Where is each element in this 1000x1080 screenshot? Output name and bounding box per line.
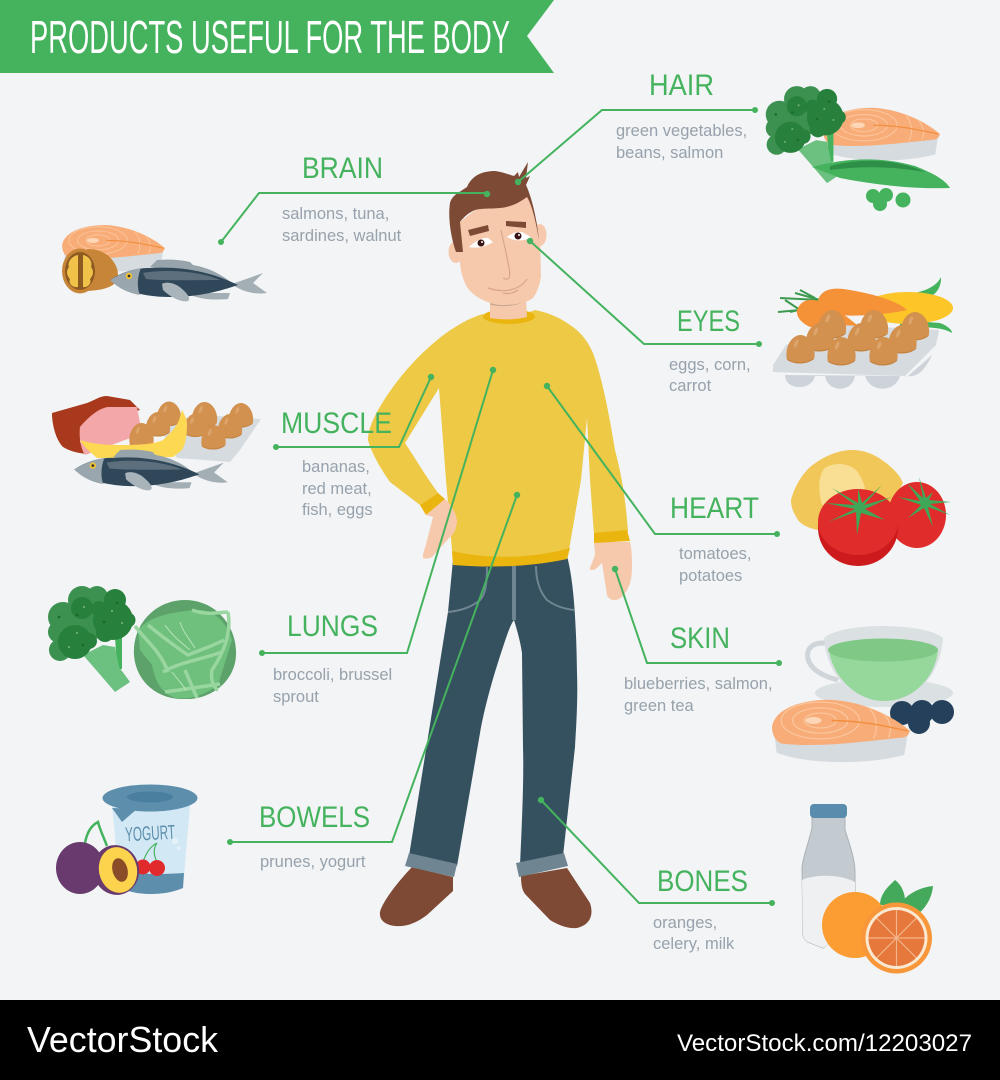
label: brain [282,152,402,245]
right hand [590,542,632,600]
label: eyes: carrot [669,377,712,395]
label: skin: green tea [624,697,695,715]
egg tray cups [785,355,932,389]
salmon [62,225,165,271]
label: heart: tomatoes, [679,545,751,563]
food: skin group [772,626,954,762]
orange [822,892,888,958]
leader line: muscle [273,374,434,450]
sweater [368,310,628,562]
salmon [823,108,940,161]
label: eyes: EYES [677,305,740,338]
carrots [778,289,907,327]
food: bowels group [56,784,198,899]
label: heart: HEART [670,492,759,525]
label: bowels: BOWELS [259,801,370,834]
food: brain group [62,225,267,301]
egg tray [155,416,261,462]
plums [56,822,144,899]
food: bones group [802,804,933,974]
label: muscle [281,407,392,519]
leader line: heart [544,383,780,537]
leader line: skin [612,566,782,666]
red meat [52,396,140,454]
egg tray [773,325,939,376]
food: eyes group [773,277,953,389]
tomato stems [825,485,892,535]
jeans cuffs [405,853,457,877]
yogurt cup [102,784,198,894]
banana [80,410,187,458]
cherries [136,843,165,876]
label: muscle: fish, eggs [302,501,373,519]
label: skin: blueberries, salmon, [624,675,773,693]
label: bones: celery, milk [653,935,735,953]
footer bar: VectorStock.com/12203027 [677,1030,972,1057]
title banner [0,0,554,73]
face [460,190,541,305]
label: lungs: sprout [273,688,319,706]
hair [449,162,539,252]
label: muscle: red meat, [302,480,372,498]
nose and mouth [488,230,527,294]
tea cup handle [808,643,838,680]
salmon [772,700,910,762]
leader line: bones [538,797,775,906]
neck [490,298,527,319]
label: lungs [273,610,392,706]
orange slice [861,902,932,974]
jeans [409,556,577,866]
ham [80,407,140,455]
blueberries [890,701,914,725]
tomatoes [888,482,946,548]
right shoe [521,868,591,928]
eyes [469,238,493,248]
label: bones [653,865,748,953]
saucer [815,679,953,707]
label: lungs: broccoli, brussel [273,666,392,684]
yogurt cup: YOGURT [125,822,176,846]
label: heart [670,492,759,585]
label: skin [624,622,773,715]
leaves [880,880,905,905]
eggs [786,310,929,365]
leader line: eyes [527,238,762,347]
food: lungs group [48,586,236,699]
title banner: PRODUCTS USEFUL FOR THE BODY [30,11,510,63]
eyebrows [468,225,489,236]
label: heart: potatoes [679,567,742,585]
ears [448,241,464,263]
collar [483,309,535,324]
label: skin: SKIN [670,622,730,655]
fish [74,450,228,490]
corn [863,277,953,333]
potato [791,450,903,530]
label: hair: HAIR [649,69,714,102]
footer bar [0,1000,1000,1080]
man figure [368,162,632,928]
broccoli [766,86,846,183]
label: muscle: MUSCLE [281,407,392,440]
label: brain: salmons, tuna, [282,205,389,223]
label: brain: sardines, walnut [282,227,402,245]
label: eyes: eggs, corn, [669,356,751,374]
label: bones: BONES [657,865,748,898]
label: hair [616,69,747,162]
sweater hem [452,548,570,567]
jeans pockets [448,566,574,612]
food: muscle group [52,396,261,490]
pea pod [812,159,950,211]
label: hair: green vegetables, [616,122,747,140]
footer bar: VectorStock [27,1019,219,1060]
sweater cuffs [420,493,445,515]
label: bones: oranges, [653,914,717,932]
left shoe [380,867,453,926]
leader line: lungs [259,367,496,656]
left hand [423,499,457,559]
food: heart group [791,450,951,566]
label: bowels: prunes, yogurt [260,853,366,871]
label: eyes [669,305,751,395]
leader line: hair [515,107,758,185]
tea cup [824,626,943,702]
leader line: bowels [227,492,520,845]
fish [110,260,267,301]
leader line: brain [218,191,490,245]
broccoli [48,586,136,692]
label: muscle: bananas, [302,458,370,476]
cabbage [134,600,236,699]
milk bottle [802,816,855,948]
label: lungs: LUNGS [287,610,378,643]
food: hair group [766,86,950,211]
eggs [129,402,253,450]
label: hair: beans, salmon [616,144,723,162]
label: brain: BRAIN [302,152,383,185]
label: bowels [259,801,370,871]
walnut [62,248,118,294]
